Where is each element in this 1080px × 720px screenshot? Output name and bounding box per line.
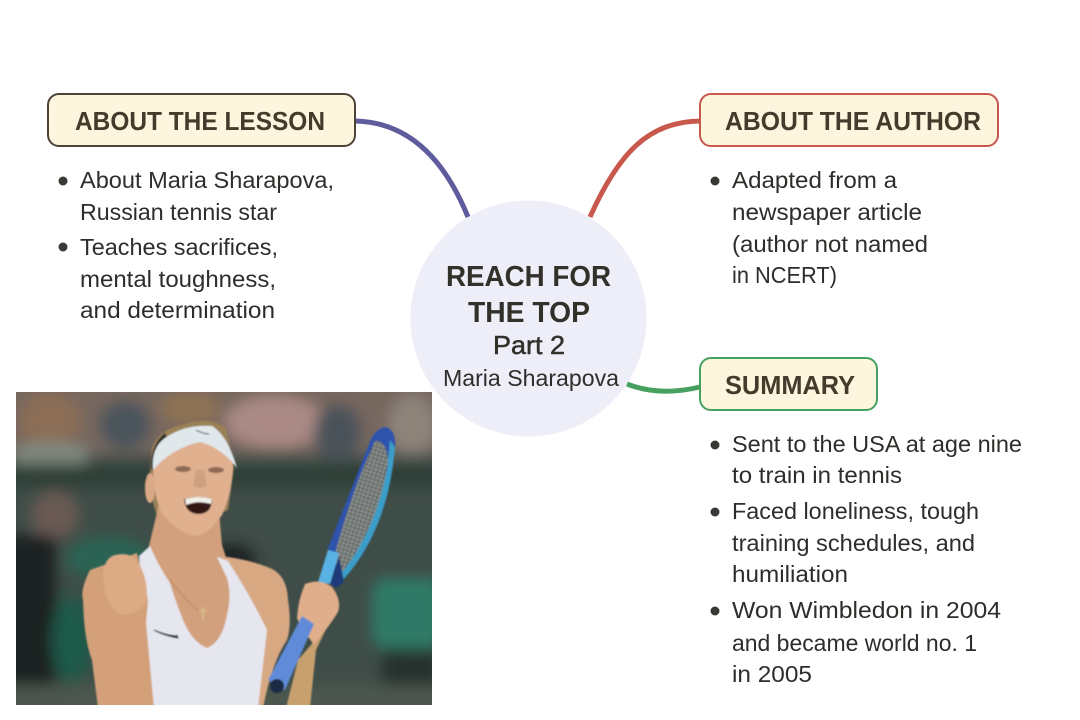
white halter top [139, 546, 267, 708]
lesson bullets: mental toughness, [80, 266, 276, 292]
hair [149, 420, 235, 514]
heading: summary [700, 358, 877, 410]
lesson bullets: and determination [80, 297, 275, 323]
swoosh logo [154, 630, 178, 638]
author bullets: Adapted from a [732, 167, 897, 193]
summary bullets: in 2005 [732, 661, 812, 687]
face [153, 440, 233, 536]
central title: Maria Sharapova [443, 365, 619, 391]
summary bullets [710, 431, 1022, 687]
lesson bullets: Russian tennis star [80, 199, 277, 225]
central title: REACH FOR [446, 261, 611, 293]
central title: Part 2 [493, 330, 565, 360]
heading: about the author: ABOUT THE AUTHOR [725, 106, 981, 136]
far forearm [286, 630, 326, 705]
central title: THE TOP [468, 297, 590, 329]
visor [153, 426, 237, 470]
racket throat [318, 550, 339, 584]
racket head [328, 427, 395, 580]
summary bullets: Sent to the USA at age nine [732, 431, 1022, 457]
author bullets: in NCERT) [732, 262, 837, 288]
summary bullets: and became world no. 1 [732, 630, 977, 656]
connector: summary to centre [627, 384, 700, 391]
lesson bullets: Teaches sacrifices, [80, 234, 278, 260]
mind map infographic [16, 93, 1021, 705]
summary bullets: training schedules, and [732, 530, 975, 556]
panel: summary [700, 358, 1022, 687]
open mouth [184, 497, 212, 514]
necklace [170, 580, 200, 612]
author bullets: (author not named [732, 231, 928, 257]
player [82, 421, 395, 708]
connector: lesson to centre [355, 121, 468, 217]
panel: about the lesson [48, 94, 355, 323]
lesson bullets [58, 167, 334, 323]
summary bullets: Won Wimbledon in 2004 [732, 597, 1001, 623]
photo: Maria Sharapova celebrating with racket [16, 392, 432, 705]
near shoulder and upper arm [218, 556, 290, 708]
blurred crowd and court background [16, 392, 432, 705]
central title [443, 261, 619, 391]
heading: about the lesson: ABOUT THE LESSON [75, 106, 325, 136]
heading: summary: SUMMARY [725, 370, 855, 400]
summary bullets: Faced loneliness, tough [732, 498, 979, 524]
heading: about the lesson [48, 94, 355, 146]
fist [103, 554, 147, 615]
hand [297, 582, 339, 645]
summary bullets: humiliation [732, 561, 848, 587]
left arm [82, 553, 154, 708]
central topic circle [410, 200, 646, 436]
heading: about the author [700, 94, 998, 146]
racket grip [268, 616, 314, 690]
connector: author to centre [590, 121, 700, 217]
neck and chest [148, 506, 230, 649]
author bullets: newspaper article [732, 199, 922, 225]
author bullets [710, 167, 928, 288]
lesson bullets: About Maria Sharapova, [80, 167, 334, 193]
panel: about the author [700, 94, 998, 288]
summary bullets: to train in tennis [732, 462, 902, 488]
